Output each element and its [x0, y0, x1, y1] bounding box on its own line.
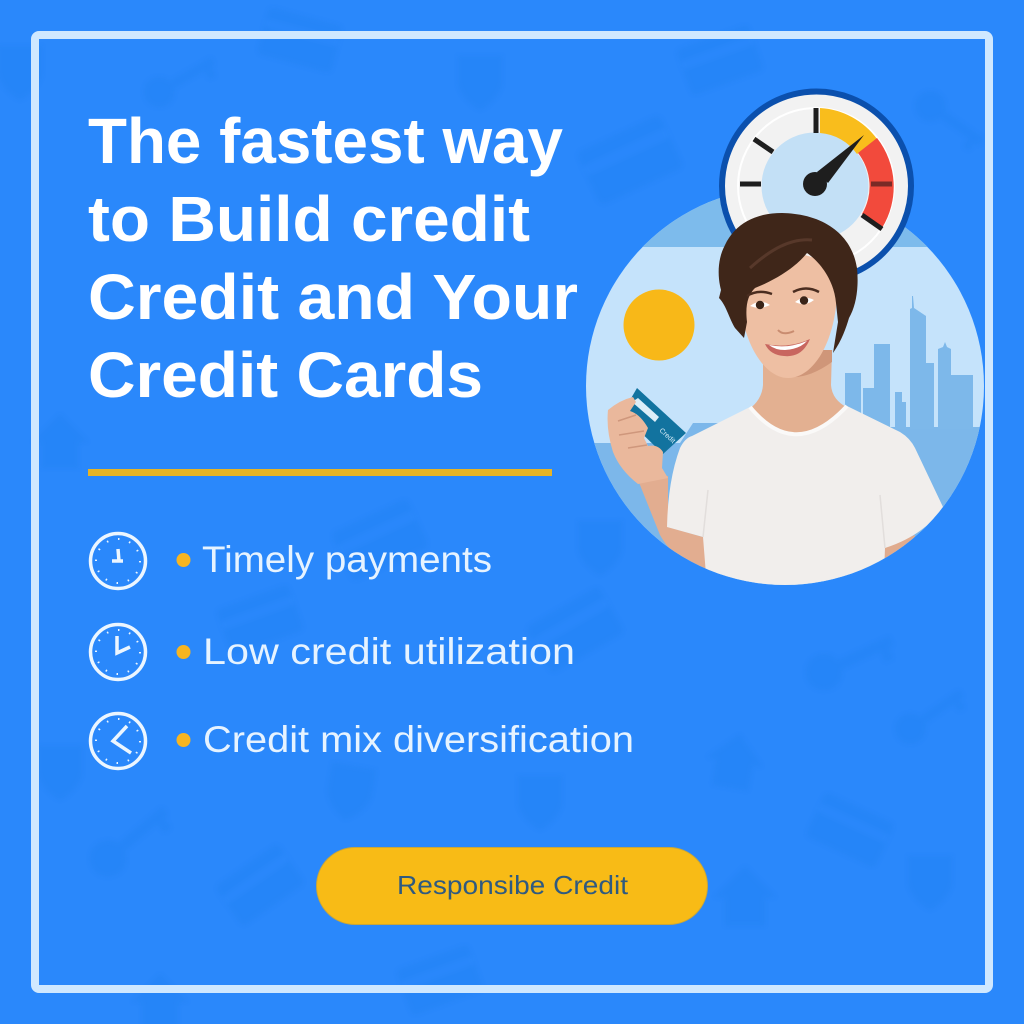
clock icon: [90, 534, 146, 588]
item: timely payments: Timely payments: [202, 539, 492, 580]
title: The fastest way: [88, 105, 563, 177]
title: Credit Cards: [88, 339, 483, 411]
item: timely payments: [90, 534, 492, 588]
item: low credit utilization: [90, 624, 575, 680]
right forearm: [884, 535, 915, 558]
clock icon: [90, 624, 146, 680]
button: [316, 848, 708, 924]
title: to Build credit: [88, 183, 530, 255]
needle: [817, 135, 864, 183]
woman: [608, 213, 943, 600]
hair: [719, 213, 858, 353]
smile: [765, 339, 810, 356]
clock icon: [90, 714, 146, 768]
nose: [778, 330, 794, 333]
scene circle: [586, 187, 984, 588]
item: low credit utilization: Low credit utilization: [203, 631, 575, 672]
left arm: [638, 476, 710, 572]
sun: [624, 290, 694, 360]
list: [90, 534, 634, 768]
item: credit mix diversification: Credit mix diversification: [203, 719, 634, 760]
city skyline: [845, 296, 973, 429]
item: credit mix diversification: [90, 714, 634, 768]
credit card: [630, 388, 686, 454]
illustration: person with gauge: [586, 92, 984, 600]
yellow zone: [820, 108, 877, 154]
ticks: [740, 108, 892, 229]
hand: [608, 397, 668, 484]
neck: [752, 362, 844, 432]
t-shirt: [667, 406, 943, 600]
button: Responsibe Credit: [397, 870, 629, 900]
red zone: [858, 138, 894, 228]
credit card: Credit: [658, 427, 676, 445]
gauge: [722, 92, 911, 280]
title: Credit and Your: [88, 261, 578, 333]
eyes: [747, 288, 819, 309]
face: [740, 253, 837, 378]
title: [88, 105, 578, 411]
divider: [88, 469, 552, 476]
